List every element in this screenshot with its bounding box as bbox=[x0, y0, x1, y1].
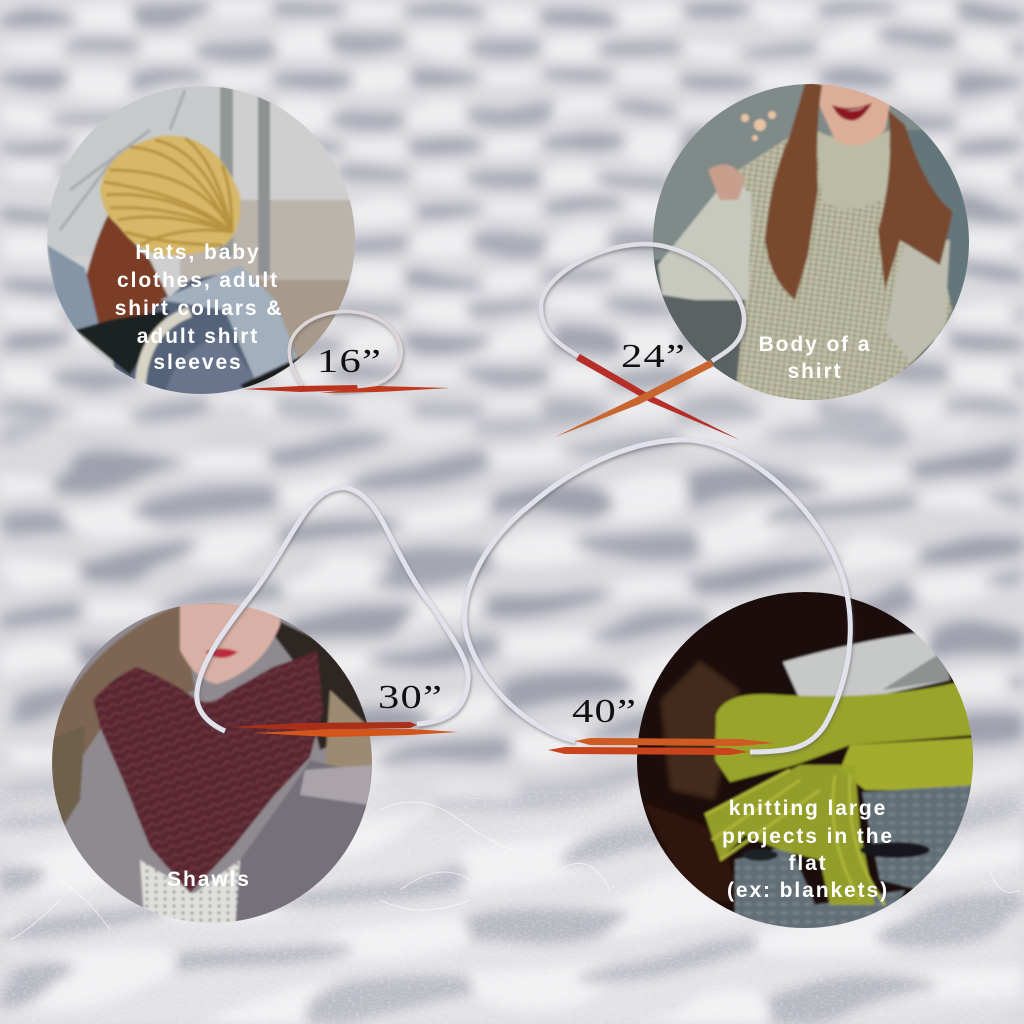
caption: hat circle: shirt collars & bbox=[115, 297, 283, 320]
photo circle: scarf bbox=[50, 600, 375, 930]
caption: hat circle: sleeves bbox=[153, 351, 243, 374]
caption: blanket circle: projects in the bbox=[722, 825, 894, 848]
needle: 30 inch bbox=[197, 488, 468, 737]
needle: 40 inch bbox=[465, 440, 850, 755]
caption: hat circle: clothes, adult bbox=[117, 269, 279, 292]
label: 24 inch: 24” bbox=[621, 338, 686, 375]
needle: 16 inch bbox=[243, 312, 450, 393]
label: 40 inch: 40” bbox=[572, 693, 637, 730]
caption: hat circle: Hats, baby bbox=[135, 241, 261, 264]
caption: blanket circle: knitting large bbox=[729, 797, 887, 820]
caption: sweater circle: Body of a bbox=[759, 333, 871, 356]
photo circle: sweater bbox=[650, 80, 975, 410]
photo circle: folded blankets bbox=[635, 590, 975, 935]
caption: sweater circle: shirt bbox=[787, 360, 843, 383]
needle: 24 inch bbox=[541, 244, 744, 440]
caption: scarf circle: Shawls bbox=[167, 868, 251, 891]
caption: blanket circle: flat bbox=[788, 852, 828, 875]
caption: blanket circle: (ex: blankets) bbox=[727, 879, 889, 902]
label: 16 inch: 16” bbox=[317, 343, 382, 380]
photo circle: hat bbox=[47, 86, 360, 400]
label: 30 inch: 30” bbox=[378, 679, 443, 716]
caption: hat circle: adult shirt bbox=[137, 325, 259, 348]
